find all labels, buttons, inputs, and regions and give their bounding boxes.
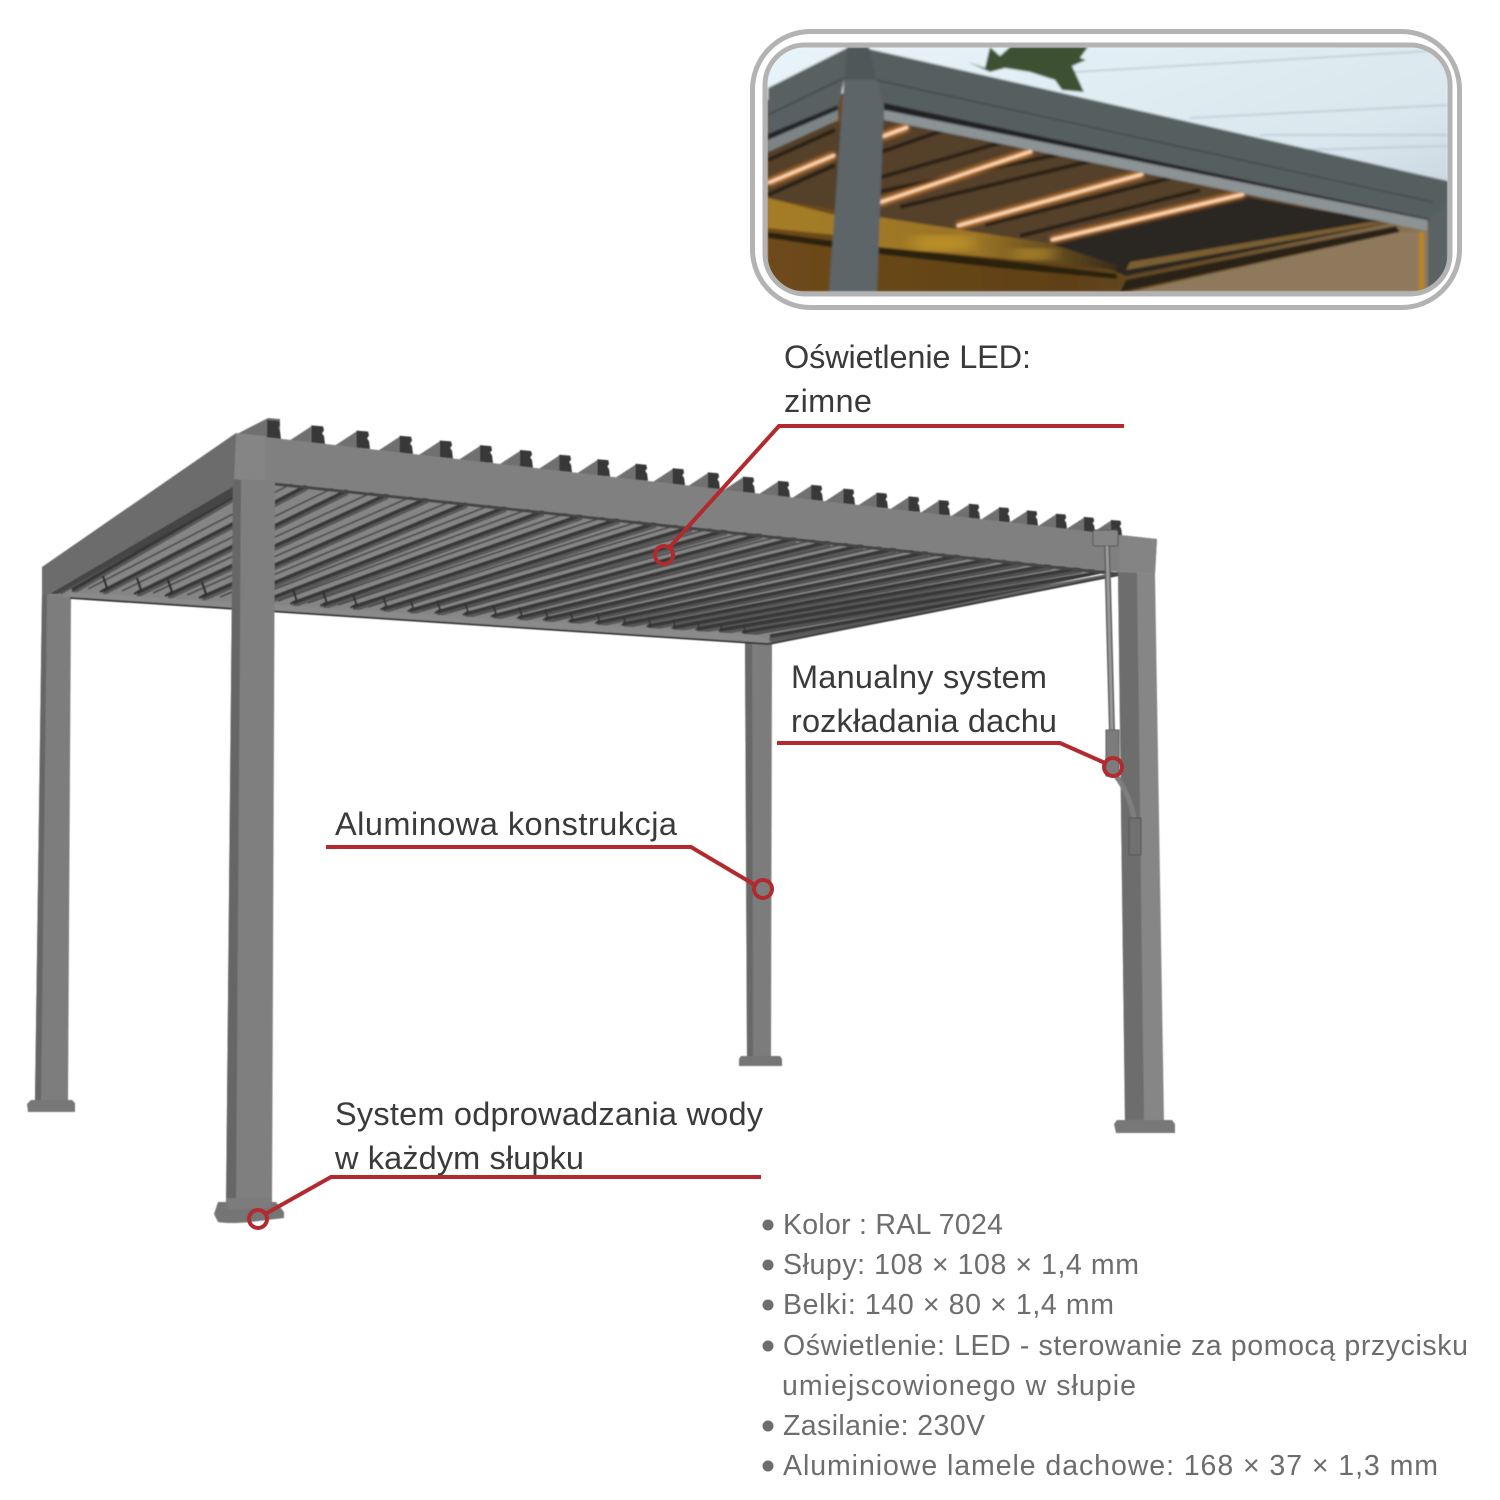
back post [739, 640, 782, 1066]
photo outer frame [752, 32, 1460, 308]
manual roof mechanism: box, rod, sleeve and handle [1093, 530, 1141, 855]
right beam faces [860, 47, 1448, 220]
leader line [267, 1177, 761, 1213]
callout: water drainage [249, 1096, 764, 1228]
spec: colour: Kolor : RAL 7024 [783, 1209, 1003, 1241]
pergola 3D structure [27, 418, 1175, 1223]
left beam faces [768, 47, 850, 140]
specification list [762, 1209, 1468, 1482]
back beam with lamella brackets [70, 575, 1118, 644]
photo inner frame [765, 45, 1450, 294]
far left post [27, 594, 75, 1112]
spec: beams: Belki: 140 × 80 × 1,4 mm [783, 1289, 1114, 1321]
front left post [214, 479, 284, 1223]
roof end caps of the slats [237, 418, 1122, 535]
spec: lamellas: Aluminiowe lamele dachowe: 168 × 37 × 1,3 mm [783, 1450, 1438, 1482]
spec: power: Zasilanie: 230V [783, 1410, 985, 1442]
leader marker [1104, 758, 1122, 776]
leader marker [754, 880, 772, 898]
leader marker [249, 1210, 267, 1228]
callout: LED lighting [655, 339, 1124, 564]
callout label second line: rozkładania dachu [791, 703, 1057, 739]
callout label: Oświetlenie LED: [784, 339, 1031, 375]
callout: aluminium construction [326, 806, 772, 898]
spec: posts: Słupy: 108 × 108 × 1,4 mm [783, 1249, 1139, 1281]
callout label second line: zimne [784, 383, 872, 419]
roof underside with lamellas [45, 476, 1118, 644]
callout: manual roof system [777, 659, 1122, 776]
photo image [767, 47, 1448, 292]
callout label second line: w każdym słupku [334, 1140, 584, 1176]
photo post [829, 80, 884, 292]
front beam [265, 437, 1157, 574]
leader line [326, 847, 755, 885]
spec: lighting: Oświetlenie: LED - sterowanie za pomocą przycisku [783, 1330, 1468, 1362]
callout label: System odprowadzania wody [335, 1096, 764, 1132]
corner cap [234, 433, 265, 481]
bullet markers [762, 1220, 774, 1472]
leader marker [655, 546, 673, 564]
callout label: Manualny system [791, 659, 1047, 695]
spec: lighting continued: umiejscowionego w słupie [782, 1370, 1136, 1402]
leader line [668, 426, 1124, 549]
left side beam [42, 433, 236, 595]
tree foliage [968, 47, 1088, 92]
photo inset: LED-lit roof corner [752, 32, 1460, 308]
leader line [777, 743, 1105, 763]
callout label: Aluminowa konstrukcja [335, 806, 678, 842]
right post [1114, 572, 1175, 1133]
